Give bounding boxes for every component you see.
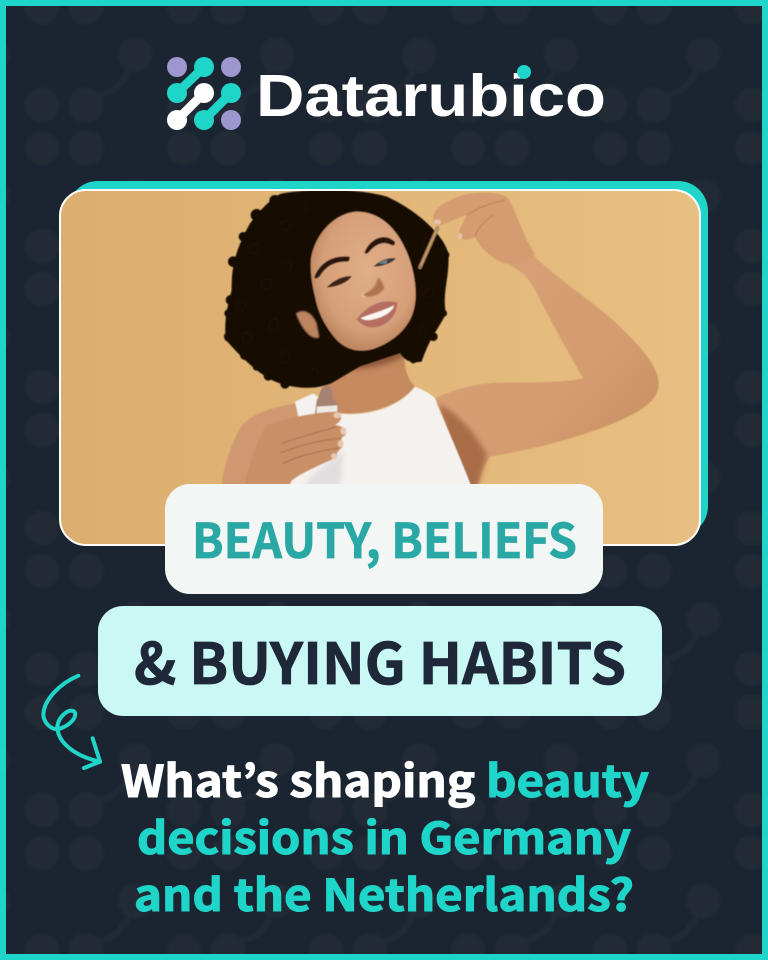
ear <box>296 311 319 338</box>
hair <box>224 190 449 389</box>
photo outline <box>60 190 700 545</box>
heading pill: Beauty, Beliefs: BEAUTY, BELIEFS <box>192 502 577 572</box>
hair curl highlights <box>236 203 434 377</box>
line 2: decisions in Germany <box>137 803 631 867</box>
neck <box>326 352 415 414</box>
line 1: What’s shaping beauty <box>121 746 649 810</box>
tank top <box>288 387 473 490</box>
heading pill: Beauty, Beliefs <box>165 484 603 594</box>
raised hand <box>433 193 535 264</box>
nose <box>362 278 384 297</box>
photo: woman applying serum <box>60 190 700 545</box>
heading pill: & Buying Habits <box>98 606 662 716</box>
face <box>311 212 416 351</box>
question text <box>121 746 649 924</box>
line 3: and the Netherlands? <box>134 860 634 924</box>
panel: teal backing card <box>68 181 708 536</box>
wordmark: Datarubico <box>256 63 606 129</box>
eyes <box>327 276 352 287</box>
lips <box>357 301 397 327</box>
bottle <box>315 386 339 417</box>
right arm <box>435 255 659 490</box>
arrow: hand-drawn loop pointing to question <box>43 676 100 768</box>
eyebrows <box>314 256 350 278</box>
logo: Datarubico <box>167 57 606 130</box>
dropper <box>420 228 437 267</box>
icon: logo mark <box>167 57 241 130</box>
left shoulder and arm <box>221 403 300 490</box>
heading pill: & Buying Habits: & BUYING HABITS <box>134 619 626 701</box>
lower hand <box>243 412 346 490</box>
teeth <box>361 305 394 320</box>
